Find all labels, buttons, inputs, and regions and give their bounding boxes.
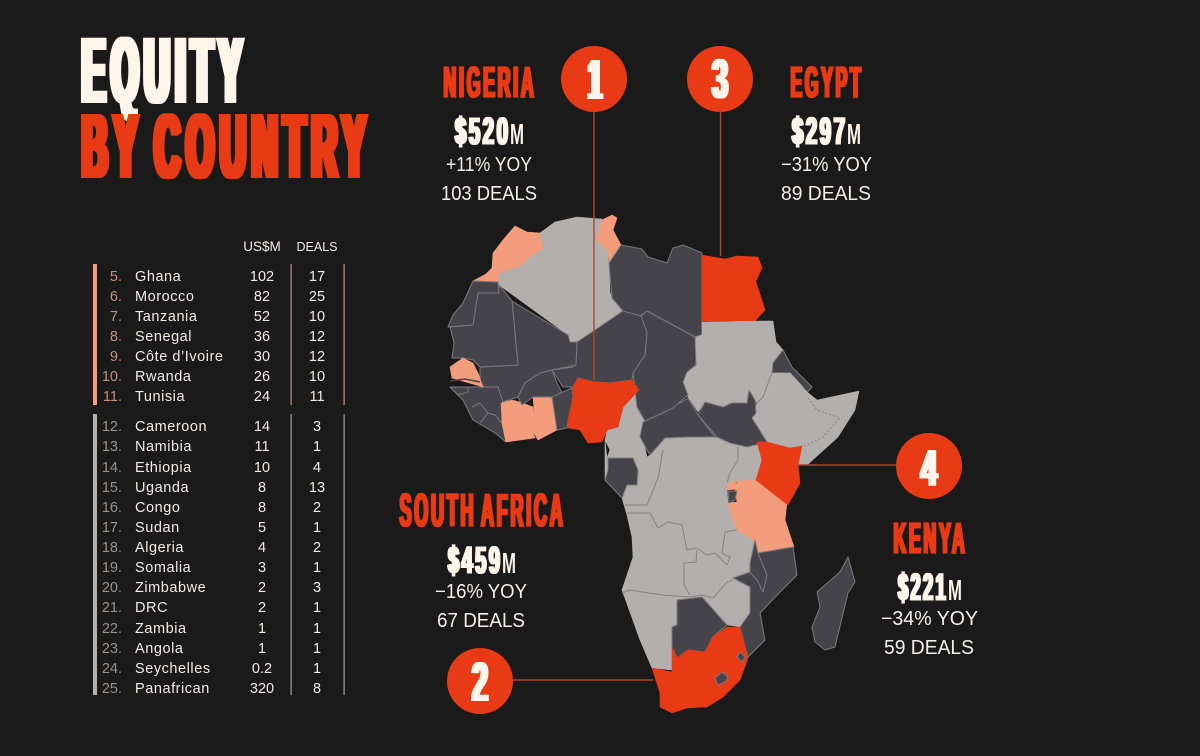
table group: ranks 12 to 25: Zambia <box>135 621 187 637</box>
Burundi <box>728 491 737 503</box>
table group: ranks 12 to 25: 1 <box>313 661 321 677</box>
table group: ranks 12 to 25: 8 <box>313 681 321 697</box>
marker 2: 2 <box>472 650 488 713</box>
table group: ranks 12 to 25: 1 <box>258 641 266 657</box>
marker 3: 3 <box>712 47 728 110</box>
South Africa <box>652 627 748 713</box>
table group: ranks 5 to 11: 82 <box>254 289 270 305</box>
table group: ranks 12 to 25: 1 <box>258 621 266 637</box>
table group: ranks 12 to 25: 12. <box>102 419 122 435</box>
callout: South Africa: 67 DEALS <box>437 610 525 632</box>
table group: ranks 5 to 11: 6. <box>110 289 122 305</box>
table group: ranks 12 to 25: 24. <box>102 661 122 677</box>
text: BY COUNTRY <box>82 97 372 197</box>
Togo and Benin <box>552 388 573 430</box>
table group: ranks 5 to 11: 5. <box>110 269 122 285</box>
text: EGYPT <box>790 58 864 107</box>
callout: Egypt: 89 DEALS <box>781 183 871 205</box>
Libya <box>609 245 702 337</box>
callout: Kenya <box>881 514 978 659</box>
Lesotho <box>715 672 728 685</box>
callout: South Africa: $459 <box>448 540 502 582</box>
table group: ranks 12 to 25: 25. <box>102 681 122 697</box>
table group: ranks 5 to 11: 10. <box>102 369 122 385</box>
table group: ranks 12 to 25 <box>93 414 345 697</box>
Eritrea and Djibouti <box>772 350 812 397</box>
Tunisia <box>597 215 621 263</box>
table group: ranks 12 to 25: 11 <box>254 439 270 455</box>
table group: ranks 12 to 25: 2 <box>258 580 266 596</box>
table group: ranks 5 to 11: 8. <box>110 329 122 345</box>
table group: ranks 12 to 25: 13. <box>102 439 122 455</box>
Ghana <box>532 397 557 440</box>
Mauritania <box>450 285 518 367</box>
text: KENYA <box>894 514 968 563</box>
table group: ranks 12 to 25: Algeria <box>135 540 184 556</box>
table group: ranks 5 to 11: 17 <box>309 269 325 285</box>
Gambia strip <box>450 379 480 382</box>
title <box>82 20 372 197</box>
table group: ranks 5 to 11: Rwanda <box>135 369 192 385</box>
table group: ranks 12 to 25: 1 <box>313 520 321 536</box>
table group: ranks 12 to 25: Sudan <box>135 520 180 536</box>
table group: ranks 5 to 11: Ghana <box>135 269 182 285</box>
table group: ranks 12 to 25: 13 <box>309 480 325 496</box>
table group: ranks 5 to 11: 12 <box>309 329 325 345</box>
callout: Egypt <box>781 58 872 205</box>
connector: South Africa <box>512 679 653 681</box>
callout: Egypt: $297 <box>792 111 848 153</box>
table group: ranks 12 to 25: 1 <box>313 439 321 455</box>
table group: ranks 12 to 25: Namibia <box>135 439 192 455</box>
callout: Egypt: M <box>847 119 861 151</box>
table group: ranks 12 to 25: Congo <box>135 500 180 516</box>
Western Sahara <box>448 281 499 327</box>
table group: ranks 12 to 25: 1 <box>313 621 321 637</box>
table group: ranks 12 to 25: 3 <box>313 419 321 435</box>
callout: South Africa <box>400 484 566 632</box>
table column headers: US$M <box>243 239 281 254</box>
Cameroon <box>605 380 647 458</box>
table group: ranks 5 to 11: 52 <box>254 309 270 325</box>
table group: ranks 12 to 25: 320 <box>250 681 274 697</box>
Egypt <box>702 255 765 321</box>
table group: ranks 12 to 25: 20. <box>102 580 122 596</box>
table group: ranks 12 to 25: 10 <box>254 460 270 476</box>
table group: ranks 5 to 11: 7. <box>110 309 122 325</box>
marker 1: 1 <box>589 48 601 112</box>
Mali <box>480 301 577 402</box>
table group: ranks 12 to 25: 3 <box>258 560 266 576</box>
Rwanda <box>727 481 737 490</box>
table column headers <box>243 239 338 254</box>
Ethiopia borders <box>757 373 840 447</box>
table group: ranks 5 to 11: 12 <box>309 349 325 365</box>
central and southern light countries <box>605 437 767 670</box>
table group: ranks 12 to 25: 2 <box>258 600 266 616</box>
callout: Nigeria: 103 DEALS <box>441 183 537 205</box>
table group: ranks 5 to 11: 24 <box>254 389 270 405</box>
Congo basin boundaries <box>622 447 738 598</box>
table group: ranks 12 to 25: 1 <box>313 641 321 657</box>
table group: ranks 12 to 25: 22. <box>102 621 122 637</box>
table group: ranks 12 to 25: 18. <box>102 540 122 556</box>
map of Africa <box>448 215 859 713</box>
table group: ranks 12 to 25: 8 <box>258 500 266 516</box>
marker 1 <box>561 46 627 112</box>
Botswana <box>672 597 727 658</box>
callout: Nigeria <box>441 58 537 205</box>
table group: ranks 12 to 25: 14 <box>254 419 270 435</box>
table group: ranks 12 to 25: 5 <box>258 520 266 536</box>
table group: ranks 5 to 11: 10 <box>309 309 325 325</box>
callout: Nigeria: M <box>510 119 524 151</box>
Chad <box>633 311 696 421</box>
table column headers: DEALS <box>296 240 338 254</box>
table group: ranks 12 to 25: 2 <box>313 540 321 556</box>
marker 4 <box>896 433 962 499</box>
connector: Egypt <box>720 110 722 256</box>
table group: ranks 12 to 25: Seychelles <box>135 661 211 677</box>
table group: ranks 12 to 25: 15. <box>102 480 122 496</box>
connector: Kenya <box>798 464 898 466</box>
Cote d'Ivoire <box>501 400 535 442</box>
table group: ranks 5 to 11: 36 <box>254 329 270 345</box>
table group: ranks 12 to 25: Angola <box>135 641 184 657</box>
Burkina Faso <box>518 370 563 405</box>
table group: ranks 12 to 25: 16. <box>102 500 122 516</box>
table group: ranks 12 to 25: 3 <box>313 580 321 596</box>
callout: Nigeria: $520 <box>455 111 511 153</box>
marker 3 <box>687 46 753 112</box>
table group: ranks 5 to 11: 102 <box>250 269 274 285</box>
ranking table <box>93 239 345 697</box>
Mozambique and Malawi <box>733 540 797 657</box>
callout: Kenya: $221 <box>898 567 948 609</box>
South Sudan <box>698 390 767 447</box>
table group: ranks 12 to 25: 14. <box>102 460 122 476</box>
marker 4: 4 <box>921 440 937 498</box>
table group: ranks 5 to 11: 11. <box>103 389 122 405</box>
table group: ranks 12 to 25: Panafrican <box>135 681 210 697</box>
table group: ranks 5 to 11: 11 <box>309 389 325 405</box>
Ethiopia and Somalia <box>752 373 859 465</box>
table group: ranks 5 to 11: 10 <box>309 369 325 385</box>
text: SOUTH AFRICA <box>400 484 566 536</box>
Morocco <box>473 226 544 282</box>
connector: Nigeria <box>593 110 595 380</box>
Tanzania <box>728 480 794 554</box>
table group: ranks 12 to 25: 1 <box>313 560 321 576</box>
table group: ranks 5 to 11: Morocco <box>135 289 194 305</box>
table group: ranks 12 to 25: Somalia <box>135 560 192 576</box>
table group: ranks 5 to 11: Tunisia <box>135 389 185 405</box>
title: EQUITY <box>82 20 248 122</box>
Guinea, Sierra Leone, Liberia <box>450 387 506 442</box>
table group: ranks 12 to 25: Zimbabwe <box>135 580 206 596</box>
Malawi border <box>750 553 767 592</box>
table group: ranks 12 to 25: Ethiopia <box>135 460 192 476</box>
callout: South Africa: −16% YOY <box>435 581 527 603</box>
table group: ranks 12 to 25: 17. <box>102 520 122 536</box>
table group: ranks 5 to 11: Tanzania <box>135 309 198 325</box>
table group: ranks 5 to 11: 9. <box>110 349 122 365</box>
table group: ranks 12 to 25: 8 <box>258 480 266 496</box>
marker 2 <box>447 648 513 714</box>
Kenya <box>756 442 802 505</box>
table group: ranks 12 to 25: 4 <box>313 460 321 476</box>
callout: Kenya: M <box>948 575 962 607</box>
Madagascar <box>812 557 855 650</box>
table group: ranks 5 to 11: 30 <box>254 349 270 365</box>
Algeria <box>498 217 623 342</box>
table group: ranks 12 to 25: Uganda <box>135 480 189 496</box>
table group: ranks 12 to 25: 1 <box>313 600 321 616</box>
callout: Nigeria: +11% YOY <box>446 154 532 176</box>
Nigeria <box>568 378 639 443</box>
West African coastal borders <box>450 387 502 423</box>
table group: ranks 5 to 11: 26 <box>254 369 270 385</box>
text: NIGERIA <box>444 58 536 107</box>
table group: ranks 12 to 25: 19. <box>102 560 122 576</box>
table group: ranks 5 to 11: 25 <box>309 289 325 305</box>
table group: ranks 12 to 25: DRC <box>135 600 168 616</box>
table group: ranks 5 to 11: Côte d’Ivoire <box>135 349 224 365</box>
Gabon and Equatorial Guinea <box>605 458 638 498</box>
table group: ranks 12 to 25: Cameroon <box>135 419 207 435</box>
Sudan <box>683 321 783 412</box>
Niger <box>552 311 647 387</box>
Central African Republic <box>640 398 715 455</box>
table group: ranks 5 to 11: Senegal <box>135 329 192 345</box>
table group: ranks 12 to 25: 0.2 <box>252 661 272 677</box>
table group: ranks 12 to 25: 4 <box>258 540 266 556</box>
Senegal <box>450 358 483 387</box>
Eswatini <box>737 652 745 662</box>
callout: South Africa: M <box>502 548 516 580</box>
table group: ranks 12 to 25: 21. <box>102 600 122 616</box>
table group: ranks 12 to 25: 23. <box>102 641 122 657</box>
callout: Egypt: −31% YOY <box>781 154 872 176</box>
callout: Kenya: 59 DEALS <box>884 637 974 659</box>
table group: ranks 5 to 11 <box>93 264 345 405</box>
callout: Kenya: −34% YOY <box>881 608 978 630</box>
table group: ranks 12 to 25: 2 <box>313 500 321 516</box>
